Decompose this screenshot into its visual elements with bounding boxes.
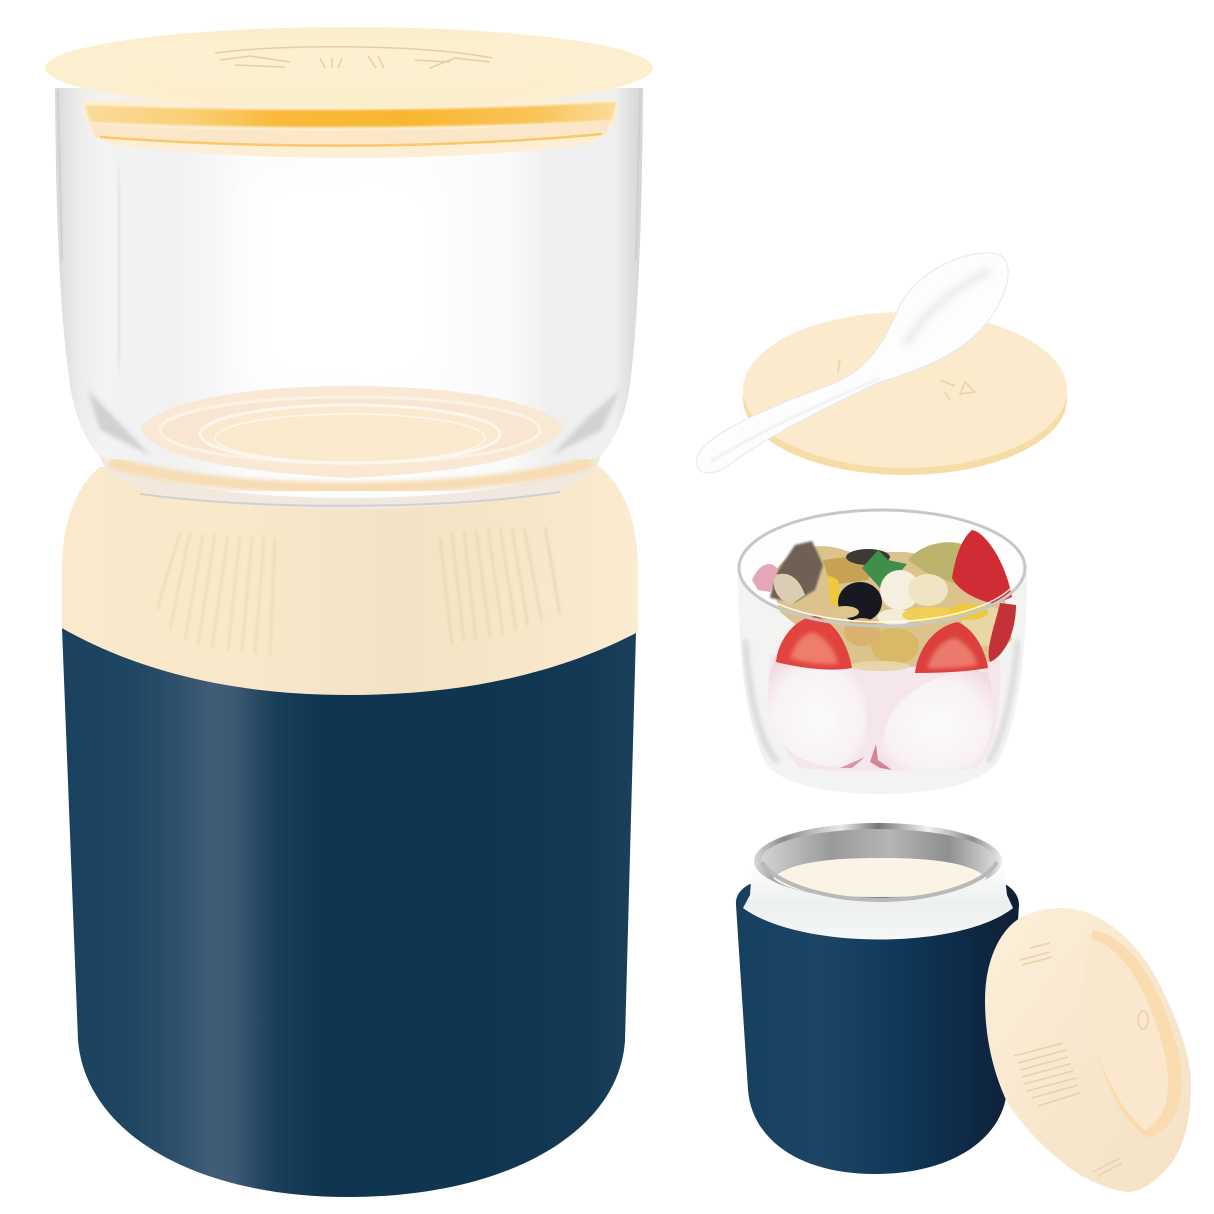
- bowl rim highlight: [739, 510, 1025, 626]
- navy insulated body: [62, 628, 636, 1197]
- peach base disc: [140, 386, 564, 478]
- dark glass corner reflections: [88, 390, 150, 455]
- small lid with spoon: [697, 253, 1067, 475]
- lid recess: [1087, 930, 1182, 1138]
- navy sleeve: [736, 884, 1019, 1174]
- inner lid seal: [82, 100, 618, 158]
- embossed lid mark: [215, 47, 492, 68]
- flat lid: [743, 312, 1067, 475]
- small navy jar: [736, 823, 1019, 1174]
- bowl glass: [738, 570, 1027, 794]
- main jar: [45, 27, 653, 1197]
- bowl inner back: [738, 510, 1026, 626]
- granola topping: [752, 541, 1012, 671]
- grip ribs right: [440, 527, 560, 645]
- glass bowl with food: [738, 510, 1027, 794]
- lid ribs: [1014, 943, 1122, 1176]
- top lid: [45, 27, 653, 109]
- white inner collar: [743, 868, 1013, 940]
- vent button: [1138, 1011, 1148, 1029]
- vertical glass reflections: [118, 170, 120, 370]
- strawberries: [776, 530, 1016, 673]
- steel rim: [754, 823, 1002, 900]
- white spoon: [697, 253, 1008, 473]
- cream collar: [62, 467, 638, 695]
- yogurt layer: [768, 655, 1000, 771]
- glass cup: [55, 88, 643, 510]
- tilted cream lid: [985, 908, 1191, 1192]
- grip ribs left: [157, 532, 275, 655]
- glass bottom rim: [100, 455, 600, 510]
